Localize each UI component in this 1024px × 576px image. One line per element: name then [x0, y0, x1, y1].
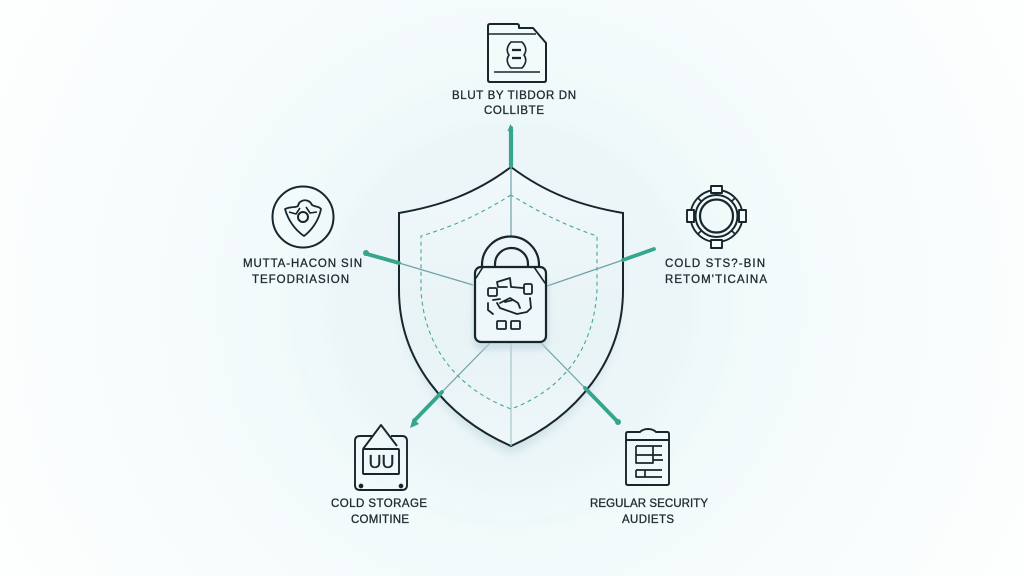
feature: top folder	[452, 24, 576, 117]
label: BLUT BY TIBDOR DN	[452, 90, 576, 102]
label: TEFODRIASION	[252, 274, 349, 286]
feature: cold storage	[331, 425, 427, 526]
label: REGULAR SECURITY	[590, 498, 708, 510]
arrow: bottom left	[410, 392, 442, 428]
icon: gear	[687, 186, 746, 248]
label	[590, 498, 708, 526]
label: COLD STS?-BIN	[665, 258, 765, 270]
label: RETOM'TICAINA	[665, 274, 767, 286]
icon: circled shield	[272, 186, 334, 248]
feature: right gear	[665, 186, 767, 286]
arrow: bottom right	[585, 388, 621, 425]
lock shadow	[473, 277, 549, 350]
label	[331, 498, 427, 526]
arrow: top	[508, 124, 514, 166]
lock body	[475, 267, 546, 342]
icon: folder with coin	[488, 24, 546, 82]
feature: left emblem	[243, 186, 362, 286]
label: COLD STORAGE	[331, 498, 427, 510]
icon: storage device	[355, 425, 407, 490]
central shield	[399, 167, 623, 454]
arrow: right	[623, 249, 654, 260]
label: MUTTA-HACON SIN	[243, 258, 362, 270]
shield outline	[399, 167, 623, 446]
arrow: left	[363, 250, 399, 263]
icon: clipboard	[626, 429, 669, 485]
label: AUDIETS	[622, 514, 674, 526]
lock circuit glyph	[488, 278, 532, 329]
feature: security audits	[590, 429, 708, 526]
shield shadow	[403, 175, 619, 454]
label: COMITINE	[351, 514, 409, 526]
padlock icon	[473, 236, 549, 350]
inner dashed shield	[421, 195, 597, 409]
label: COLLIBTE	[484, 105, 544, 117]
label	[243, 258, 362, 286]
lock shackle	[482, 236, 539, 267]
label	[452, 90, 576, 117]
label	[665, 258, 767, 286]
icon glyph: UU	[368, 452, 394, 472]
connector lines from lock to features	[399, 167, 623, 446]
